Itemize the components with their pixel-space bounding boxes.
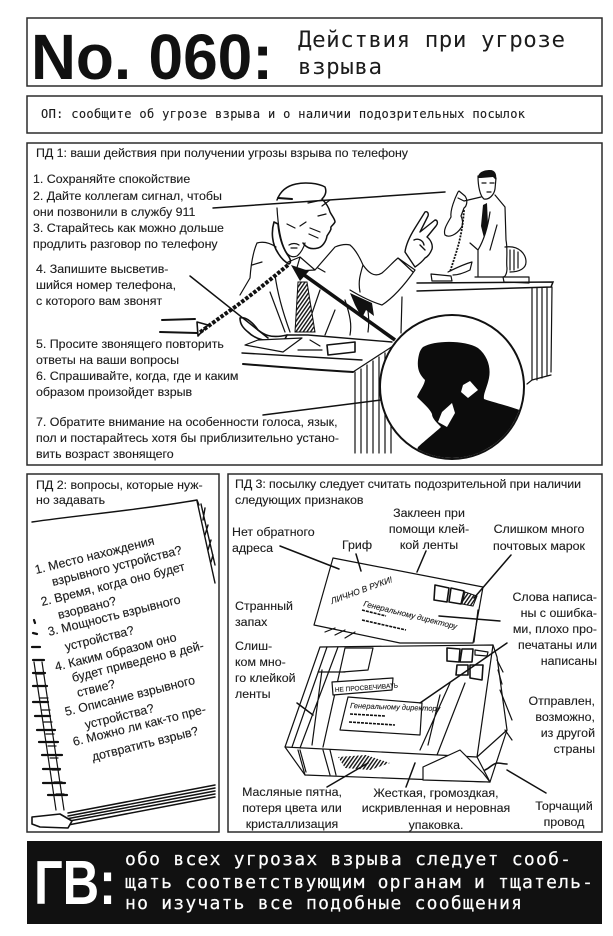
envelope address: Генеральному директору <box>363 599 459 631</box>
parcel sign labels: кой ленты <box>400 538 458 552</box>
parcel sign labels: провод <box>544 815 585 829</box>
PD3 heading: следующих признаков <box>235 493 364 507</box>
arrow from caller to recipient <box>291 265 395 340</box>
objective panel <box>27 96 602 133</box>
parcel sign labels: потеря цвета или <box>242 801 342 815</box>
torn flap and wire <box>423 750 490 782</box>
PD1 instructions list: 2. Дайте коллегам сигнал, чтобы <box>33 189 222 203</box>
PD1 instructions list: 5. Просите звонящего повторить <box>36 337 224 351</box>
PD1 instructions list: ответы на ваши вопросы <box>36 353 179 367</box>
illustration: colleague phoning at desk <box>401 170 553 384</box>
conclusion text: но изучать все подобные сообщения <box>125 893 522 914</box>
parcel address label <box>340 697 442 735</box>
leader lines <box>190 192 445 415</box>
PD2 rotated question list: устройства? <box>63 623 135 654</box>
parcel sign labels <box>232 506 597 832</box>
PD2 rotated question list: ствие? <box>75 677 117 700</box>
parcel sign labels: Слова написа- <box>512 590 597 604</box>
parcel sign labels: запах <box>235 615 268 629</box>
illustration: man at desk on phone <box>160 183 437 453</box>
PD2 rotated question list: 1. Место нахождения <box>33 534 156 577</box>
PD1 instructions list: вить возраст звонящего <box>36 447 174 461</box>
leader lines <box>280 546 546 793</box>
conclusion label: ГВ: <box>34 849 116 918</box>
objective panel: ОП: сообщите об угрозе взрыва и о наличии подозрительных посылок <box>41 107 526 121</box>
header panel <box>27 18 602 93</box>
PD1 instructions list: продлить разговор по телефону <box>33 237 218 251</box>
parcel sign labels: почтовых марок <box>493 539 586 553</box>
PD1 instructions list: 6. Спрашивайте, когда, где и каким <box>36 369 238 383</box>
PD1 instructions list <box>33 172 339 461</box>
parcel sign labels: го клейкой <box>235 671 296 685</box>
parcel sign labels: Странный <box>235 599 293 613</box>
parcel sign labels: написаны <box>541 654 597 668</box>
envelope stamps <box>434 585 477 606</box>
PD2 rotated question list: 3. Мощность взрывного <box>46 592 182 639</box>
parcel do-not-xray sticker: НЕ ПРОСВЕЧИВАТЬ <box>335 683 398 694</box>
parcel sign labels: Заклеен при <box>393 506 465 520</box>
parcel sign labels: Масляные пятна, <box>242 785 342 799</box>
oil stain <box>338 755 390 770</box>
parcel sign labels: Слиш- <box>235 639 272 653</box>
parcel sign labels: ны с ошибка- <box>521 606 597 620</box>
parcel sign labels: ленты <box>235 687 271 701</box>
PD2 heading: ПД 2: вопросы, которые нуж- <box>36 478 203 492</box>
parcel sign labels: Нет обратного <box>232 525 315 539</box>
parcel sign labels: Гриф <box>342 538 372 552</box>
conclusion panel <box>27 841 602 924</box>
PD1 heading: ПД 1: ваши действия при получении угрозы взрыва по телефону <box>36 146 409 160</box>
parcel sign labels: Торчащий <box>535 799 593 813</box>
parcel sign labels: ком мно- <box>235 655 286 669</box>
PD2 rotated question list: 4. Каким образом оно <box>53 630 178 674</box>
parcel sign labels: кристаллизация <box>246 817 338 831</box>
PD2 rotated question list: 6. Можно ли как-то пре- <box>71 702 207 749</box>
parcel stamps <box>447 648 488 680</box>
parcel sign labels: возможно, <box>535 710 595 724</box>
parcel do-not-xray sticker <box>332 678 398 695</box>
PD2 rotated question list: будет приведено в дей- <box>70 639 205 685</box>
parcel sign labels: Отправлен, <box>528 694 595 708</box>
PD1 instructions list: образом произойдет взрыв <box>36 385 193 399</box>
conclusion text: обо всех угрозах взрыва следует сооб- <box>125 849 571 870</box>
parcel sign labels: из другой <box>541 726 595 740</box>
parcel sign labels: адреса <box>232 541 273 555</box>
PD2 heading: но задавать <box>36 493 105 507</box>
PD2 rotated question list: устройства? <box>83 701 155 732</box>
title text: взрыва <box>298 54 382 80</box>
title text: Действия при угрозе <box>298 27 565 53</box>
PD2 rotated question list <box>33 534 207 764</box>
PD2 heading <box>36 478 203 507</box>
PD1 instructions list: с которого вам звонят <box>36 294 162 308</box>
parcel sign labels: ми, плохо про- <box>513 622 597 636</box>
illustration: spiral notebook <box>32 500 215 828</box>
parcel sign labels: Слишком много <box>494 522 585 536</box>
conclusion text: щать соответствующим органам и тщатель- <box>125 872 593 893</box>
PD1 instructions list: пол и постарайтесь хотя бы приблизительно устано- <box>36 431 339 445</box>
panel: PD3 suspicious parcel <box>228 474 602 832</box>
panel: PD1 phone threat <box>27 143 602 470</box>
PD1 instructions list: 7. Обратите внимание на особенности голоса, язык, <box>36 415 338 429</box>
illustration: envelope <box>314 558 483 643</box>
PD1 instructions list: шийся номер телефона, <box>36 278 176 292</box>
parcel sign labels: страны <box>554 742 595 756</box>
PD1 instructions list: 4. Запишите высветив- <box>36 262 168 276</box>
title text <box>298 27 565 80</box>
icon: caller silhouette in circle <box>380 315 525 470</box>
parcel sign labels: искривленная и неровная <box>362 801 510 815</box>
parcel sign labels: Жесткая, громоздкая, <box>373 786 499 800</box>
PD3 heading: ПД 3: посылку следует считать подозрительной при наличии <box>235 477 581 491</box>
PD2 rotated question list: взрывного устройства? <box>50 543 183 589</box>
parcel sign labels: упаковка. <box>409 818 463 832</box>
PD1 instructions list: 3. Старайтесь как можно дольше <box>33 221 224 235</box>
parcel address label: Генеральному директору <box>350 701 442 713</box>
envelope stamp text: ЛИЧНО В РУКИ! <box>328 574 394 606</box>
PD1 instructions list: 1. Сохраняйте спокойствие <box>33 172 190 186</box>
illustration: parcel box <box>285 645 512 782</box>
title number: No. 060: <box>31 21 273 93</box>
parcel sign labels: помощи клей- <box>389 522 469 536</box>
panel: PD2 questions <box>27 474 219 832</box>
PD2 rotated question list: 5. Описание взрывного <box>63 673 196 719</box>
PD1 instructions list: они позвонили в службу 911 <box>33 205 195 219</box>
PD3 heading <box>235 477 581 507</box>
parcel sign labels: печатаны или <box>518 638 597 652</box>
PD2 rotated question list: взорвано? <box>56 594 118 622</box>
PD2 rotated question list: 2. Время, когда оно будет <box>39 559 187 609</box>
PD2 rotated question list: дотвратить взрыв? <box>90 724 200 764</box>
conclusion text <box>125 849 593 914</box>
